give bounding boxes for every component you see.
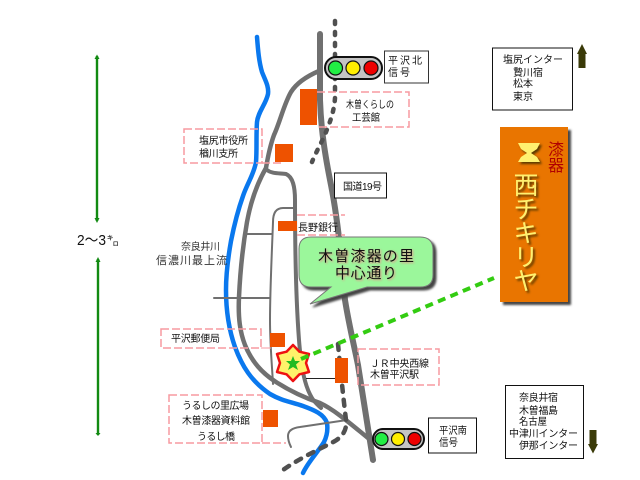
thin side roads	[214, 208, 347, 447]
traffic light: Hirasawa north	[325, 57, 382, 79]
box: southbound destinations: 伊那インター	[519, 440, 578, 452]
box: northbound destinations: 贄川宿	[513, 66, 543, 79]
box: northbound destinations: 東京	[513, 90, 533, 103]
river label: 奈良井川	[181, 240, 220, 253]
building: Urushi no Sato	[263, 410, 278, 427]
label: Urushi facilities: うるし橋	[197, 430, 235, 443]
sign text: shop name: チ	[513, 196, 539, 224]
arrow: south	[588, 430, 598, 454]
old road	[239, 71, 368, 438]
label: Urushi facilities	[169, 395, 286, 443]
label: city office: 塩尻市役所	[199, 134, 248, 147]
building: Kiso-Hirasawa station	[335, 358, 348, 383]
railway: JR Chuo West Line, south	[283, 344, 346, 470]
national route 19	[320, 34, 373, 460]
box: southbound destinations	[506, 386, 584, 458]
sign text: shop name: 西	[513, 172, 539, 200]
label: JR station: ＪＲ中央西線	[370, 357, 429, 370]
box: Hirasawa north signal: 平沢北	[388, 54, 422, 67]
box: National Route 19: 国道19号	[343, 180, 382, 193]
box: southbound destinations: 中津川インター	[509, 427, 578, 440]
sign text: lacquerware: 漆	[548, 141, 564, 159]
label: Nagano Bank	[297, 215, 345, 235]
box: northbound destinations	[492, 48, 572, 110]
sign text: lacquerware	[548, 141, 564, 175]
label: city office	[184, 129, 283, 163]
callout: Kiso lacquerware central street	[299, 237, 433, 304]
callout: Kiso lacquerware central street: 木曽漆器の里	[318, 248, 414, 265]
callout: Kiso lacquerware central street: 中心通り	[335, 265, 397, 282]
label: craft hall	[317, 92, 409, 127]
sign text: shop name: ヤ	[513, 268, 539, 296]
icon: hourglass crest	[518, 143, 540, 162]
label: JR station	[358, 349, 439, 385]
distance label: 2～3	[77, 232, 106, 249]
box: Hirasawa south signal	[428, 418, 476, 453]
shop sign: Nishi Kiriya lacquerware	[500, 127, 568, 302]
star marker: shop location	[277, 345, 309, 381]
box: southbound destinations: 名古屋	[519, 415, 547, 428]
label: Urushi facilities: 木曽漆器資料館	[182, 414, 250, 427]
traffic light: Hirasawa south	[373, 429, 424, 449]
sign text: shop name: リ	[513, 244, 539, 272]
box: northbound destinations: 塩尻インター	[503, 53, 563, 66]
box: Hirasawa south signal: 平沢南	[439, 424, 467, 437]
town centre road	[267, 170, 321, 408]
label: city office: 楢川支所	[199, 147, 238, 160]
station leader line	[306, 378, 335, 380]
building: Kiso kurashi craft hall	[300, 89, 317, 125]
box: Hirasawa north signal: 信号	[388, 66, 410, 79]
river: Narai	[226, 37, 327, 473]
river label	[156, 240, 227, 267]
label: craft hall: 木曽くらしの	[346, 98, 394, 111]
dashed link from shop sign to star	[301, 278, 494, 359]
river label: 信濃川最上流	[156, 253, 227, 267]
box: southbound destinations: 木曽福島	[519, 404, 558, 417]
sign text: shop name: キ	[513, 220, 539, 248]
box: Hirasawa north signal	[384, 51, 428, 83]
distance label: ㌔	[107, 234, 119, 248]
arrow: north	[577, 44, 587, 68]
label: JR station: 木曽平沢駅	[370, 368, 419, 381]
box: southbound destinations: 奈良井宿	[519, 391, 558, 404]
label: Nagano Bank: 長野銀行	[298, 221, 338, 234]
sign text: shop name	[513, 172, 539, 296]
box: Hirasawa south signal: 信号	[439, 436, 458, 449]
building: city office branch	[275, 144, 293, 162]
scale arrow: lower	[96, 257, 100, 436]
railway: JR Chuo West Line, north	[312, 21, 335, 162]
label: post office	[161, 329, 271, 348]
label: Urushi facilities: うるしの里広場	[182, 399, 249, 412]
sign text: lacquerware: 器	[548, 158, 564, 175]
label: post office: 平沢郵便局	[171, 332, 220, 345]
label: craft hall: 工芸館	[352, 111, 380, 124]
building: Nagano Bank	[278, 221, 297, 231]
box: northbound destinations: 松本	[513, 77, 533, 90]
scale arrow: upper	[94, 54, 100, 223]
building: post office	[270, 333, 285, 347]
box: National Route 19	[334, 173, 386, 198]
